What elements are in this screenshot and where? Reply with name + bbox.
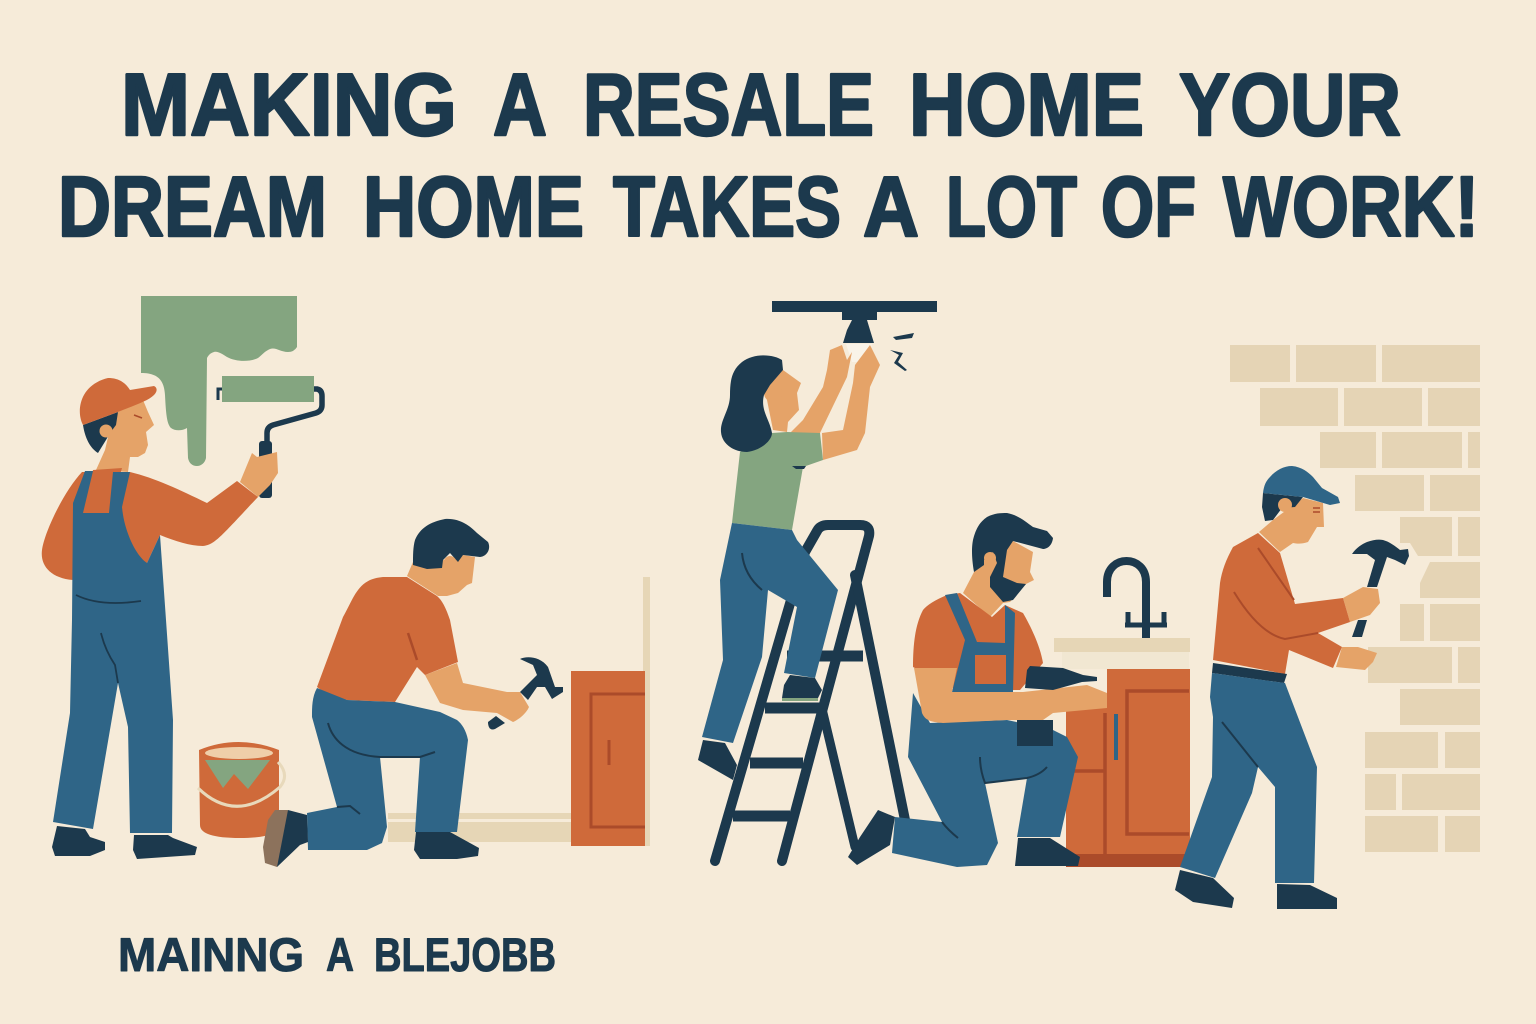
painter: cap bbox=[80, 378, 157, 425]
worker 5: head bbox=[1259, 498, 1324, 552]
worker with hammer at brick wall bbox=[1175, 466, 1409, 909]
paint bucket bbox=[198, 742, 285, 838]
worker 5: shirt bbox=[1213, 533, 1350, 674]
worker 2: shoes bbox=[270, 810, 479, 867]
painter: shirt bbox=[42, 472, 258, 580]
painter figure bbox=[42, 378, 278, 859]
title: LOT bbox=[946, 160, 1077, 255]
title: A bbox=[493, 55, 547, 154]
worker 2: shirt bbox=[317, 577, 458, 702]
title: A bbox=[863, 160, 919, 255]
kneeling worker with hammer bbox=[263, 519, 563, 867]
worker 2: head bbox=[407, 555, 475, 596]
paint roller bbox=[218, 376, 322, 498]
faucet bbox=[1107, 561, 1146, 638]
base cabinet and wall edge bbox=[388, 577, 650, 846]
painter: shoes bbox=[52, 826, 197, 859]
woman: shirt bbox=[732, 432, 823, 530]
title: HOME bbox=[909, 55, 1144, 154]
caption: A bbox=[326, 928, 354, 981]
woman: face bbox=[765, 370, 801, 432]
worker 5: hands bbox=[1336, 587, 1380, 670]
worker 4: arm bbox=[914, 668, 1107, 723]
title bbox=[58, 55, 1479, 255]
sink cabinet and faucet bbox=[1054, 561, 1190, 867]
title: HOME bbox=[363, 160, 584, 255]
caption bbox=[118, 928, 556, 981]
painter: bib panel bbox=[83, 468, 122, 513]
worker 4: shirt bbox=[913, 593, 1043, 690]
painter: overalls bbox=[53, 471, 173, 833]
woman: pants bbox=[702, 523, 838, 743]
worker 5: pants bbox=[1180, 673, 1317, 883]
painter: hair bbox=[83, 412, 118, 453]
title: OF bbox=[1101, 160, 1196, 255]
caption: MAINNG bbox=[118, 928, 304, 981]
worker 2: arm bbox=[425, 663, 529, 722]
title: YOUR bbox=[1179, 55, 1401, 154]
worker 4: pants bbox=[892, 693, 1078, 867]
worker 4: bib bbox=[945, 593, 1015, 692]
bearded worker with drill bbox=[848, 513, 1107, 867]
title: RESALE bbox=[583, 55, 874, 154]
ceiling light fixture bbox=[772, 301, 937, 371]
brick wall bbox=[1230, 345, 1480, 852]
woman: shoes bbox=[698, 675, 822, 780]
worker 5: hammer bbox=[1352, 540, 1409, 637]
green paint on wall bbox=[141, 296, 297, 466]
counter bbox=[1054, 638, 1190, 652]
worker 4: shoes bbox=[848, 810, 1080, 866]
worker 4: drill bbox=[1017, 666, 1097, 746]
title: DREAM bbox=[58, 160, 327, 255]
title: MAKING bbox=[121, 55, 457, 154]
worker 4: hair and beard bbox=[972, 513, 1053, 602]
worker 5: shoes bbox=[1175, 870, 1337, 909]
woman: hair bbox=[721, 355, 783, 452]
cabinet bbox=[1066, 700, 1190, 855]
painter: neck and head bbox=[96, 400, 154, 472]
painter: hand bbox=[240, 452, 278, 497]
woman on ladder bbox=[698, 345, 880, 780]
worker 4: neck and face bbox=[963, 540, 1034, 617]
worker 5: cap bbox=[1263, 466, 1340, 505]
worker 2: pants bbox=[307, 688, 468, 850]
title: TAKES bbox=[613, 160, 841, 255]
worker 5: hair bbox=[1262, 493, 1303, 521]
caption: BLEJOBB bbox=[374, 928, 556, 981]
worker 2: hair bbox=[413, 519, 489, 569]
step ladder bbox=[715, 525, 905, 861]
woman: arms bbox=[790, 345, 880, 460]
worker 2: hammer bbox=[488, 657, 563, 730]
title: WORK! bbox=[1223, 160, 1479, 255]
worker 5: belt bbox=[1212, 663, 1287, 683]
